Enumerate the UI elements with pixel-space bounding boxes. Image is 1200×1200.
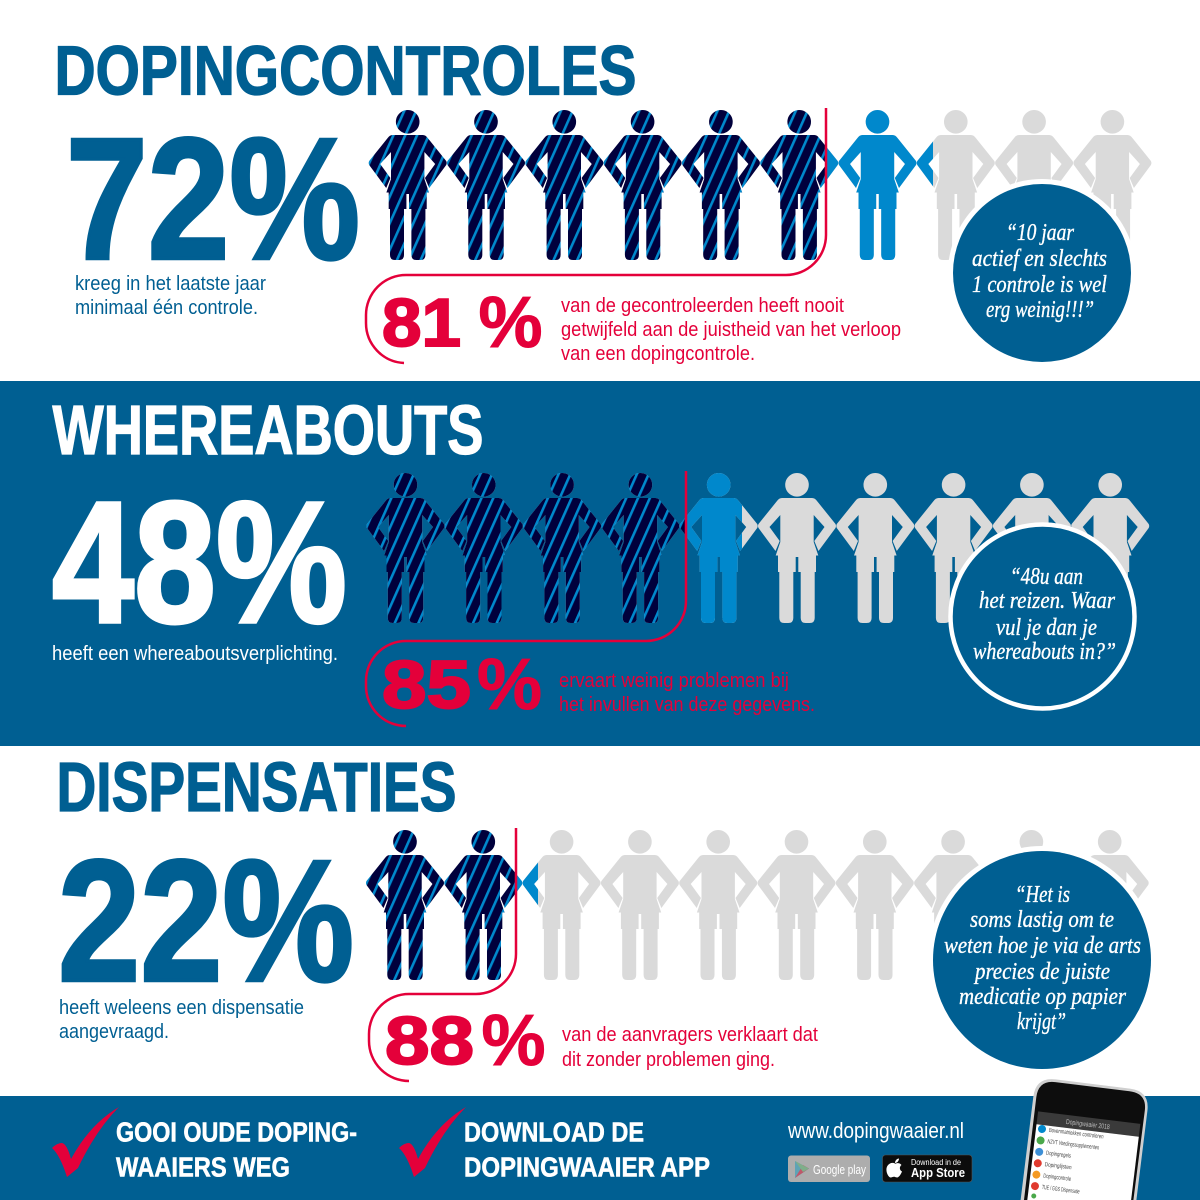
text: 85 percent description: ervaart weinig problemen bij [559, 670, 789, 692]
text: 85 percent description: het invullen van deze gegevens. [559, 694, 815, 716]
text: 22 percent description: heeft weleens een dispensatie [59, 997, 304, 1019]
stat: 81 percent: 81 [382, 285, 461, 361]
quote bubble: 48u aan het reizen: whereabouts in?” [973, 639, 1116, 665]
icon: red check 1 [52, 1107, 119, 1177]
app menu rows: NZVT Voedingssupplementen [1047, 1139, 1099, 1152]
text: download de dopingwaaier app: DOWNLOAD DE [464, 1116, 644, 1148]
band background [0, 381, 1200, 746]
text: gooi oude dopingwaaiers weg: GOOI OUDE DOPING- [116, 1116, 357, 1148]
phone screen [1036, 1111, 1140, 1137]
text: 88 percent description: van de aanvragers verklaart dat [562, 1024, 818, 1046]
icon: red check 2 [399, 1107, 466, 1177]
badge: google play: Google play [813, 1162, 866, 1177]
quote bubble: 48u aan het reizen: “48u aan [1010, 564, 1083, 590]
app menu rows: Dopingregels [1046, 1151, 1071, 1160]
quote bubble: het is soms lastig: medicatie op papier [959, 984, 1127, 1010]
quote bubble: 10 jaar actief: 1 controle is wel [972, 272, 1107, 298]
quote bubble: 48u aan het reizen: het reizen. Waar [979, 588, 1116, 614]
stat: 81 percent: % [478, 283, 542, 363]
stat: 48 percent: 48% [52, 465, 347, 659]
text: 48 percent description: heeft een whereaboutsverplichting. [52, 643, 338, 665]
stat: 88 percent [385, 1001, 546, 1081]
stat: 85 percent [382, 645, 542, 725]
pictogram: ten people, 22 percent filled [366, 830, 1149, 980]
panel: whereabouts [0, 381, 1200, 746]
stat: 85 percent: % [477, 645, 542, 725]
heading: whereabouts: WHEREABOUTS [52, 391, 484, 469]
text: 81 percent description [561, 295, 901, 365]
quote bubble: het is soms lastig [928, 846, 1156, 1074]
text: 72 percent description: kreeg in het laatste jaar [75, 273, 266, 295]
text: 22 percent description [59, 997, 304, 1043]
quote bubble: 10 jaar actief: “10 jaar [1006, 220, 1075, 246]
text: 72 percent description [75, 273, 266, 319]
phone with dopingwaaier app [1021, 1079, 1148, 1200]
text: gooi oude dopingwaaiers weg: WAAIERS WEG [116, 1152, 290, 1182]
badge: app store [882, 1155, 972, 1182]
footer background [0, 1096, 1200, 1200]
stat: 88 percent: 88 [385, 1003, 474, 1079]
stat: 81 percent [382, 283, 542, 363]
quote bubble: het is soms lastig: “Het is [1015, 882, 1070, 908]
text: download de dopingwaaier app: DOPINGWAAIER APP [464, 1152, 710, 1182]
quote bubble: het is soms lastig: precies de juiste [973, 959, 1110, 985]
text: 22 percent description: aangevraagd. [59, 1021, 169, 1043]
stat: 88 percent: % [482, 1001, 546, 1081]
text: 81 percent description: van een dopingcontrole. [561, 343, 755, 365]
red bracket line [369, 828, 516, 1081]
app menu rows: Bovenmatriekken controleren [1048, 1128, 1104, 1141]
quote bubble: het is soms lastig: soms lastig om te [970, 907, 1114, 933]
text: 85 percent description [559, 670, 815, 716]
stat: 22 percent: 22% [58, 824, 354, 1018]
text: 88 percent description [562, 1024, 818, 1071]
text: 81 percent description: van de gecontroleerden heeft nooit [561, 295, 844, 317]
quote bubble: 48u aan het reizen: vul je dan je [996, 615, 1097, 641]
quote bubble: 48u aan het reizen [950, 524, 1134, 708]
panel: dispensaties [56, 748, 1156, 1081]
heading: dispensaties: DISPENSATIES [56, 748, 456, 826]
heading: dopingcontroles: DOPINGCONTROLES [54, 32, 636, 110]
badge: app store: App Store [911, 1165, 965, 1180]
text: 72 percent description: minimaal één controle. [75, 297, 258, 319]
quote bubble: 10 jaar actief [948, 179, 1136, 367]
text: 88 percent description: dit zonder problemen ging. [562, 1049, 775, 1071]
badge: google play [788, 1156, 870, 1182]
pictogram: ten people, 72 percent filled [369, 110, 1151, 260]
app menu rows: Dopinglijsten [1044, 1162, 1072, 1171]
app menu rows: Dopingcontrole [1043, 1174, 1072, 1183]
panel: dopingcontroles [54, 32, 1151, 367]
panel: footer [0, 1079, 1200, 1200]
quote bubble: 10 jaar actief: erg weinig!!!” [986, 297, 1094, 323]
app menu rows: TUE / GGS Dispensatie [1041, 1185, 1080, 1196]
phone body [1021, 1079, 1148, 1200]
text: 81 percent description: getwijfeld aan de juistheid van het verloop [561, 319, 901, 341]
pictogram: ten people, 48 percent filled [366, 473, 1149, 623]
text: gooi oude dopingwaaiers weg [116, 1116, 357, 1182]
text: website url: www.dopingwaaier.nl [787, 1118, 964, 1143]
stat: 85 percent: 85 [382, 647, 471, 723]
quote bubble: het is soms lastig: krijgt” [1017, 1009, 1066, 1035]
app menu rows: Dopingwaaier 2018 [1066, 1119, 1110, 1131]
badge: app store: Download in de [911, 1158, 961, 1167]
red bracket line [366, 471, 686, 726]
red bracket line [366, 108, 826, 363]
text: download de dopingwaaier app [464, 1116, 710, 1182]
app menu rows [1029, 1116, 1110, 1200]
stat: 72 percent: 72% [66, 102, 360, 296]
quote bubble: het is soms lastig: weten hoe je via de arts [944, 933, 1141, 959]
quote bubble: 10 jaar actief: actief en slechts [972, 246, 1107, 272]
